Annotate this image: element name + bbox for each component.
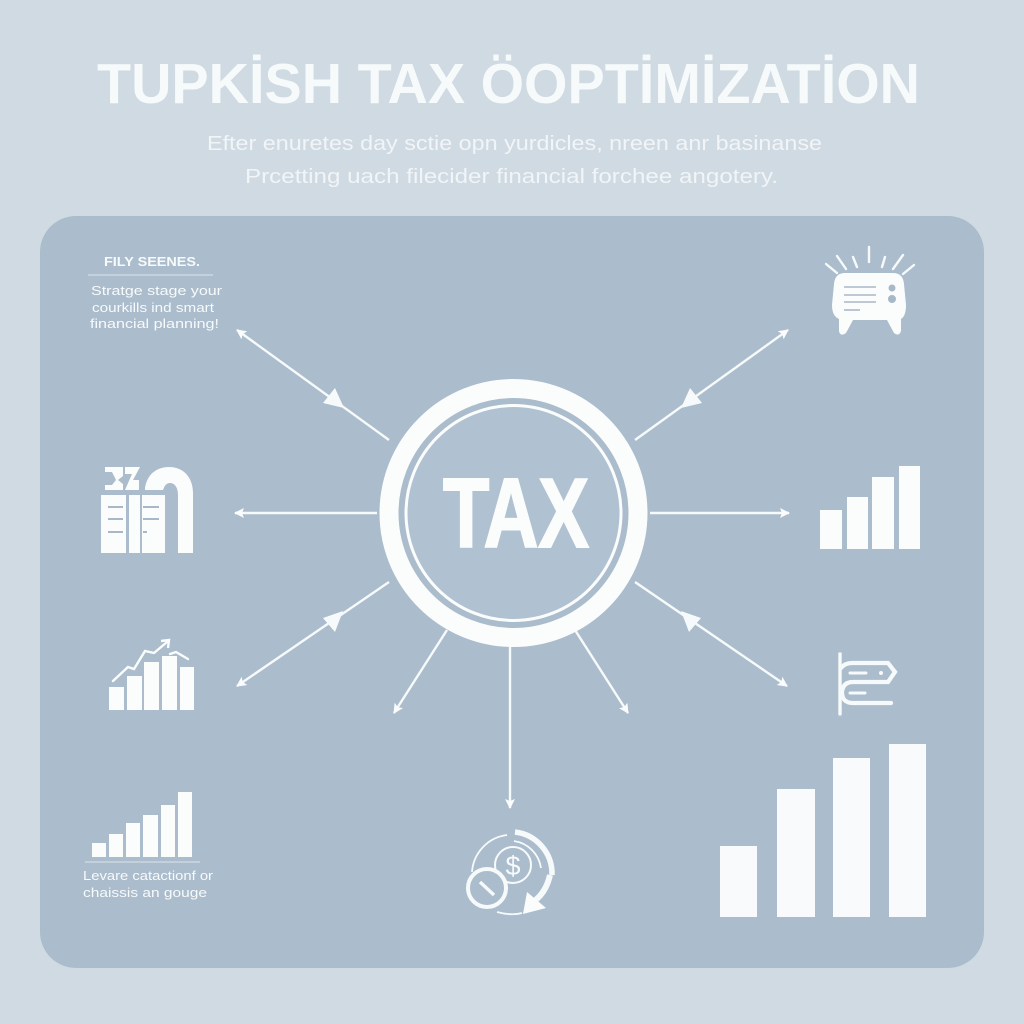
arrows radiating from the centre <box>235 330 789 808</box>
main panel <box>40 216 984 968</box>
arrow: down <box>509 645 511 808</box>
arrow: down left <box>394 630 447 713</box>
icon: bar chart with trend line <box>109 640 194 710</box>
title: TUPKİSH TAX ÖOPTİMİZATİON <box>97 52 920 116</box>
arrow: down right <box>575 630 628 713</box>
arrow: right <box>650 512 789 514</box>
icon: signpost tags <box>840 654 895 714</box>
subtitle: Efter enuretes day sctie opn yurdicles, nreen anr basinanse <box>207 133 822 155</box>
text block: top left: courkills ind smart <box>92 300 214 315</box>
icon: ascending bars with caption <box>83 792 214 900</box>
icon: bar chart right <box>820 466 920 549</box>
icon: coin cycle: $ <box>505 851 521 881</box>
arrow: upper left <box>237 330 389 440</box>
arrow: lower left <box>237 582 389 686</box>
arrow: left <box>235 512 377 514</box>
icon: large bar chart <box>720 744 926 917</box>
subtitle: Prcetting uach filecider financial forchee angotery. <box>245 166 778 188</box>
text block: top left: FILY SEENES. <box>104 254 200 269</box>
arrow: lower right <box>635 582 787 686</box>
central tax badge <box>389 388 638 638</box>
text block: top left <box>88 254 223 331</box>
icon: documents and arch <box>101 467 193 553</box>
subtitle <box>207 133 822 188</box>
text block: top left: Stratge stage your <box>91 283 223 298</box>
icon: radio device <box>826 247 914 335</box>
arrow: upper right <box>635 330 788 440</box>
text block: top left: financial planning! <box>90 316 219 331</box>
icon: ascending bars with caption: chaissis an gouge <box>83 885 207 900</box>
icon: coin cycle <box>468 832 552 914</box>
tax label: TAX <box>443 458 589 568</box>
icon: ascending bars with caption: Levare catactionf or <box>83 868 214 883</box>
